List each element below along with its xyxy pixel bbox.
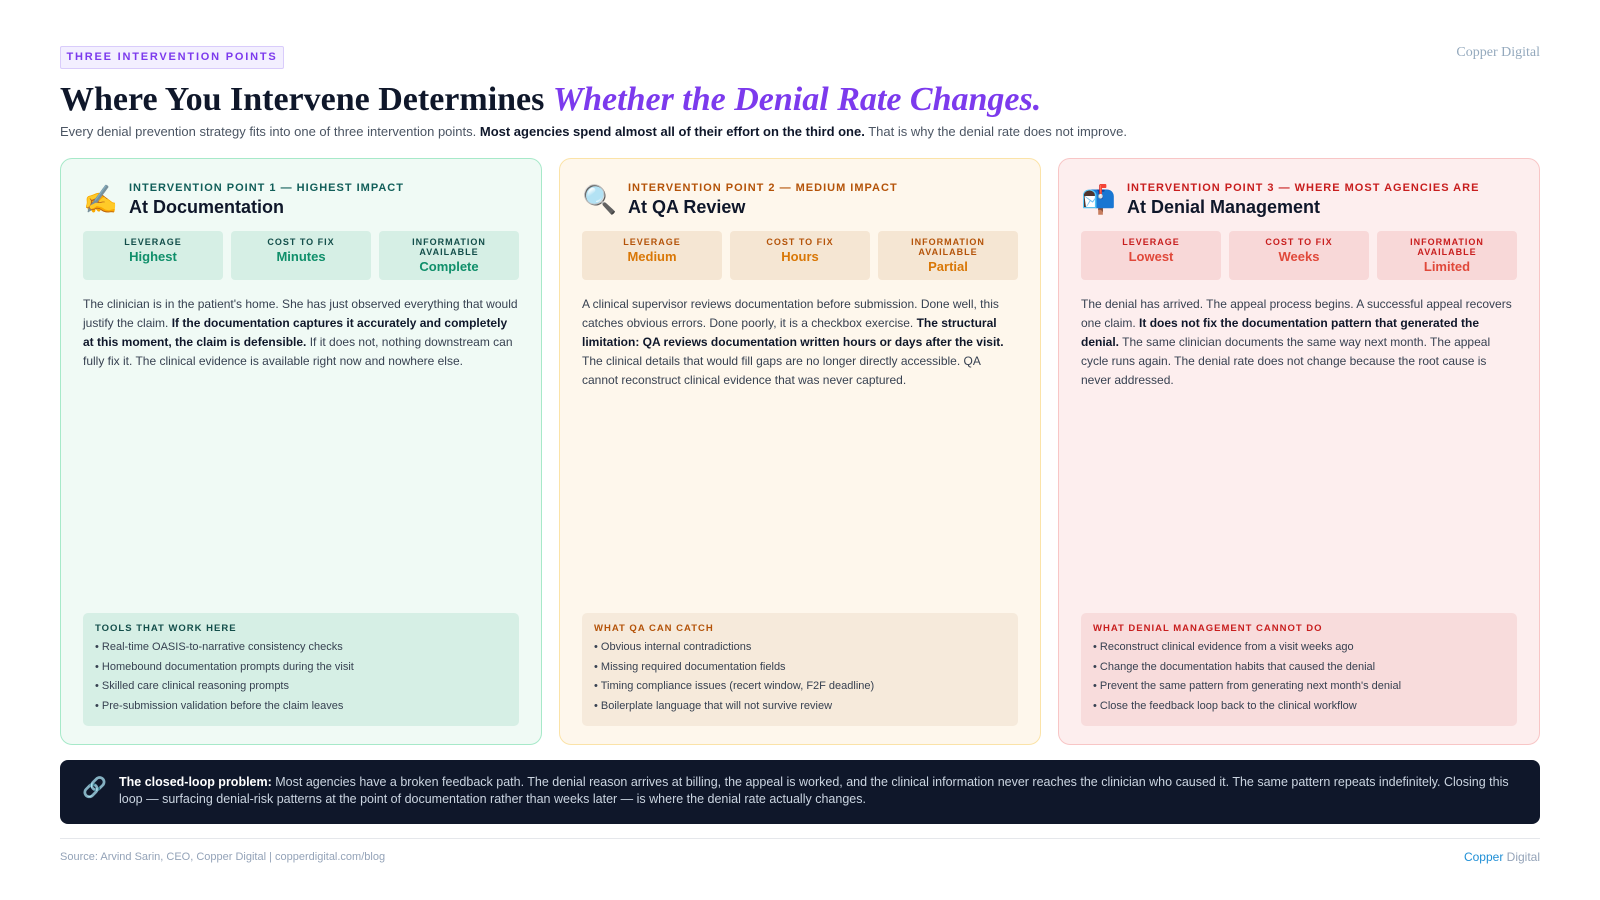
metrics: denial: INFORMATION	[1410, 237, 1484, 247]
panel: denial management	[1058, 158, 1540, 745]
box: tools that work here: • Real-time OASIS-to-narrative consistency checks	[95, 641, 343, 653]
metrics: denial: Weeks	[1279, 249, 1319, 264]
header: denial management: 📬	[1081, 184, 1116, 215]
box: what denial management cannot do	[1081, 613, 1517, 726]
header: documentation: At Documentation	[129, 197, 284, 217]
callout: closed-loop problem: The closed-loop problem: Most agencies have a broken feedback path. The denial reason arrives at billing, the appeal is worked, and the clinical information never reaches the clinician who caused it. The same pattern repeats indefinitely. Closing this loop — surfacing denial-risk patterns at the point of documentation rather than weeks later — is where the denial rate actually changes.	[119, 775, 1509, 806]
metrics: documentation: Highest	[129, 249, 177, 264]
header: QA review	[582, 182, 898, 217]
source: Source: Arvind Sarin, CEO, Copper Digital | copperdigital.com/blog	[60, 851, 385, 863]
metrics: documentation: INFORMATION	[412, 237, 486, 247]
header: QA review: 🔍	[582, 184, 617, 215]
metrics: documentation: Minutes	[276, 249, 326, 264]
box: what QA can catch: WHAT QA CAN CATCH	[594, 623, 714, 634]
header: denial management	[1081, 182, 1479, 217]
box: tools that work here: • Skilled care clinical reasoning prompts	[95, 680, 289, 692]
metrics: QA: AVAILABLE	[918, 247, 978, 257]
panel: documentation	[60, 158, 542, 745]
metrics: denial: Lowest	[1129, 249, 1173, 264]
box: tools that work here: TOOLS THAT WORK HERE	[95, 623, 237, 634]
metrics: denial: COST TO FIX	[1265, 237, 1333, 247]
metrics: denial: AVAILABLE	[1417, 247, 1477, 257]
text: documentation: The clinician is in the patient's home. She has just observed everything that would justify the claim. If the documentation captures it accurately and completely at this moment, the claim is defensible. If it does not, nothing downstream can fully fix it. The clinical evidence is available right now and nowhere else.	[83, 297, 518, 368]
box: tools that work here	[83, 613, 519, 726]
metrics: QA: Partial	[928, 259, 968, 274]
box: what denial management cannot do: • Reconstruct clinical evidence from a visit weeks ago	[1093, 641, 1354, 653]
footer brand: Copper Digital	[1464, 850, 1540, 864]
header: denial management: At Denial Management	[1127, 197, 1320, 217]
header: documentation: INTERVENTION POINT 1 — HIGHEST IMPACT	[129, 182, 404, 194]
metrics: QA: INFORMATION	[911, 237, 985, 247]
header: denial management: INTERVENTION POINT 3 — WHERE MOST AGENCIES ARE	[1127, 182, 1479, 194]
icon: link: 🔗	[82, 777, 107, 799]
box: what denial management cannot do: • Prevent the same pattern from generating next month's denial	[1093, 680, 1401, 692]
header: QA review: INTERVENTION POINT 2 — MEDIUM IMPACT	[628, 182, 898, 194]
title: Where You Intervene Determines Whether the Denial Rate Changes.	[60, 81, 1041, 118]
box: what QA can catch: • Boilerplate language that will not survive review	[594, 700, 832, 712]
metrics: denial	[1081, 231, 1517, 280]
box: tools that work here: • Homebound documentation prompts during the visit	[95, 660, 354, 672]
box: what denial management cannot do: • Close the feedback loop back to the clinical workflow	[1093, 700, 1357, 712]
metrics: denial: LEVERAGE	[1122, 237, 1180, 247]
tag: three intervention points	[60, 46, 284, 69]
metrics: QA: Hours	[781, 249, 819, 264]
box: what denial management cannot do: • Change the documentation habits that caused the denial	[1093, 660, 1375, 672]
box: tools that work here: • Pre-submission validation before the claim leaves	[95, 700, 343, 712]
metrics: denial: Limited	[1424, 259, 1470, 274]
box: what QA can catch: • Missing required documentation fields	[594, 660, 786, 672]
tag: three intervention points: THREE INTERVENTION POINTS	[66, 51, 278, 63]
metrics: documentation: LEVERAGE	[124, 237, 182, 247]
subtitle: Every denial prevention strategy fits into one of three intervention points. Most agencies spend almost all of their effort on the third one. That is why the denial rate does not improve.	[60, 124, 1127, 139]
header: documentation	[83, 182, 404, 217]
panel: QA review	[559, 158, 1041, 745]
metrics: QA	[582, 231, 1018, 280]
metrics: QA: COST TO FIX	[766, 237, 834, 247]
callout: closed-loop problem	[60, 760, 1540, 824]
header: QA review: At QA Review	[628, 197, 745, 217]
text: QA: A clinical supervisor reviews documentation before submission. Done well, this catches obvious errors. Done poorly, it is a checkbox exercise. The structural limitation: QA reviews documentation written hours or days after the visit. The clinical details that would fill gaps are no longer directly accessible. QA cannot reconstruct clinical evidence that was never captured.	[582, 297, 1004, 387]
metrics: documentation: AVAILABLE	[419, 247, 479, 257]
header: documentation: ✍️	[83, 184, 118, 215]
metrics: QA: Medium	[627, 249, 677, 264]
box: what denial management cannot do: WHAT DENIAL MANAGEMENT CANNOT DO	[1093, 623, 1323, 634]
box: what QA can catch: • Timing compliance issues (recert window, F2F deadline)	[594, 680, 874, 692]
brand top right: Copper Digital	[1456, 45, 1540, 60]
metrics: documentation: Complete	[419, 259, 479, 274]
metrics: documentation	[83, 231, 519, 280]
metrics: QA: LEVERAGE	[623, 237, 681, 247]
box: what QA can catch	[582, 613, 1018, 726]
text: denial: The denial has arrived. The appeal process begins. A successful appeal recovers one claim. It does not fix the documentation pattern that generated the denial. The same clinician documents the same way next month. The appeal cycle runs again. The denial rate does not change because the root cause is never addressed.	[1081, 297, 1512, 387]
box: what QA can catch: • Obvious internal contradictions	[594, 641, 751, 653]
metrics: documentation: COST TO FIX	[267, 237, 335, 247]
